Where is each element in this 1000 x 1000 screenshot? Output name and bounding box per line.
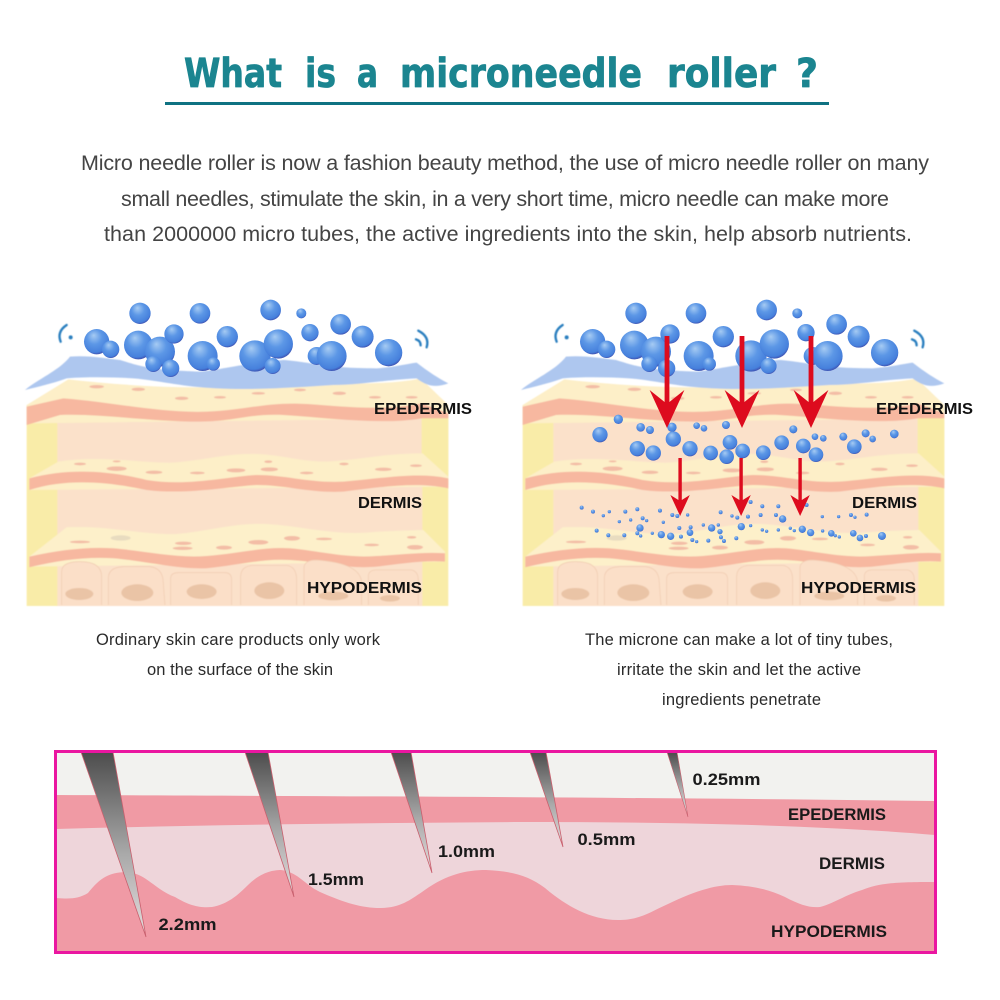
epidermis band [56, 795, 935, 952]
small red arrows [670, 458, 810, 516]
layer labels right: DERMIS [852, 495, 917, 512]
caption right [585, 631, 893, 709]
large red arrows [650, 336, 828, 428]
background air [56, 752, 935, 952]
hypodermis [56, 870, 935, 952]
dermis band [56, 822, 935, 952]
layer labels chart: DERMIS [819, 855, 885, 873]
layer labels left: EPEDERMIS [374, 401, 472, 418]
skin illustration right [521, 300, 944, 606]
layer labels chart [771, 806, 887, 941]
needle 1.0mm [391, 752, 432, 873]
title underline [165, 102, 829, 105]
panel: needle depth chart [56, 752, 936, 952]
intro paragraph: Micro needle roller is now a fashion beauty method, the use of micro needle roller on many [81, 151, 929, 175]
caption right: irritate the skin and let the active [617, 661, 861, 679]
caption right: ingredients penetrate [662, 691, 821, 709]
penetrated particles small [580, 500, 886, 543]
caption right: The microne can make a lot of tiny tubes, [585, 631, 893, 649]
title: roller [667, 51, 776, 97]
panel: microneedle skin diagram [521, 300, 973, 606]
title: is [305, 51, 336, 97]
title: What [184, 51, 282, 97]
needle length labels: 0.25mm [692, 771, 760, 789]
caption left: Ordinary skin care products only work [96, 631, 381, 649]
layer labels right: EPEDERMIS [876, 401, 973, 418]
title [184, 51, 818, 97]
title: microneedle [400, 51, 642, 97]
title: a [357, 51, 378, 97]
caption left [96, 631, 381, 679]
layer labels chart: HYPODERMIS [771, 923, 887, 941]
needle 1.5mm [245, 752, 294, 897]
layer labels right [801, 401, 973, 597]
layer labels right: HYPODERMIS [801, 580, 916, 597]
needle length labels: 2.2mm [158, 916, 216, 934]
caption left: on the surface of the skin [147, 661, 333, 679]
layer labels left: DERMIS [358, 495, 422, 512]
needle 0.25mm [667, 752, 688, 817]
skin illustration left [25, 300, 448, 606]
needle length labels: 0.5mm [578, 831, 636, 849]
needle length labels [158, 771, 760, 934]
penetrated particles medium [592, 415, 899, 464]
needle 2.2mm [81, 752, 146, 937]
intro paragraph [81, 151, 929, 246]
layer labels chart: EPEDERMIS [788, 806, 886, 824]
needle length labels: 1.0mm [438, 843, 495, 861]
layer labels left: HYPODERMIS [307, 580, 422, 597]
needle 0.5mm [530, 752, 563, 847]
intro paragraph: than 2000000 micro tubes, the active ingredients into the skin, help absorb nutrients. [104, 222, 912, 246]
chart border [56, 752, 936, 952]
panel: ordinary skin care diagram [25, 300, 472, 606]
intro paragraph: small needles, stimulate the skin, in a very short time, micro needle can make more [121, 187, 889, 211]
needle length labels: 1.5mm [308, 871, 364, 889]
layer labels left [307, 401, 472, 597]
title: ? [796, 51, 818, 97]
